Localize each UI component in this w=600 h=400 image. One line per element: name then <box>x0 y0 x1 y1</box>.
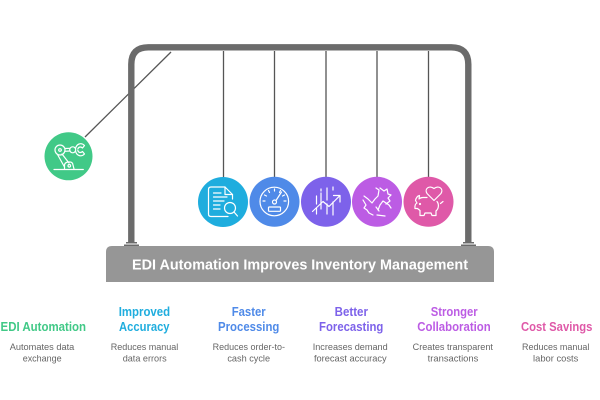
text block: EDI Automation: Automates data <box>10 341 75 352</box>
frame feet <box>124 242 476 246</box>
text block: Better Forecasting: Forecasting <box>319 319 383 334</box>
text block: Improved Accuracy: data errors <box>123 352 167 364</box>
text block: Stronger Collaboration: Creates transparent <box>413 341 493 352</box>
cradle frame <box>131 47 468 242</box>
text block: Faster Processing: Processing <box>218 319 279 334</box>
text block: Faster Processing: cash cycle <box>227 352 270 364</box>
hanging strings <box>224 51 428 178</box>
arrow: swinging pendulum string <box>85 52 171 137</box>
icon: rising chart arrow on violet ball <box>301 177 351 227</box>
text block: Better Forecasting: Better <box>335 304 368 319</box>
text block: Improved Accuracy <box>111 304 178 364</box>
text block: Cost Savings <box>521 319 592 364</box>
text block: Stronger Collaboration: Stronger <box>431 304 478 319</box>
text block: EDI Automation <box>1 319 86 364</box>
text block: Improved Accuracy: Improved <box>119 304 170 319</box>
text block: Stronger Collaboration: transactions <box>428 352 479 364</box>
text block: Cost Savings: Reduces manual <box>522 341 589 352</box>
text block: Cost Savings: labor costs <box>533 352 579 364</box>
title: EDI Automation Improves Inventory Management <box>132 258 468 274</box>
icon: shaking hands on purple ball <box>352 177 402 227</box>
text block: Improved Accuracy: Reduces manual <box>111 341 178 352</box>
text block: Stronger Collaboration: Collaboration <box>417 319 491 334</box>
icon: piggy bank with heart on pink ball <box>404 177 454 227</box>
text block: Stronger Collaboration <box>413 304 493 364</box>
text block: Faster Processing: Reduces order-to- <box>213 341 285 352</box>
icon: document with magnifier on blue ball <box>198 177 248 227</box>
text block: Faster Processing <box>213 304 285 364</box>
text block: EDI Automation: exchange <box>23 352 62 364</box>
text block: Improved Accuracy: Accuracy <box>119 319 170 334</box>
text block: Faster Processing: Faster <box>232 304 266 319</box>
text block: Better Forecasting <box>313 304 388 364</box>
icon: robot arm on green ball <box>44 132 92 180</box>
text block: EDI Automation: EDI Automation <box>1 319 86 334</box>
text block: Better Forecasting: Increases demand <box>313 341 388 352</box>
title bar <box>106 246 494 282</box>
icon: speedometer on periwinkle ball <box>250 177 300 227</box>
text block: Cost Savings: Cost Savings <box>521 319 592 334</box>
text block: Better Forecasting: forecast accuracy <box>314 352 387 364</box>
